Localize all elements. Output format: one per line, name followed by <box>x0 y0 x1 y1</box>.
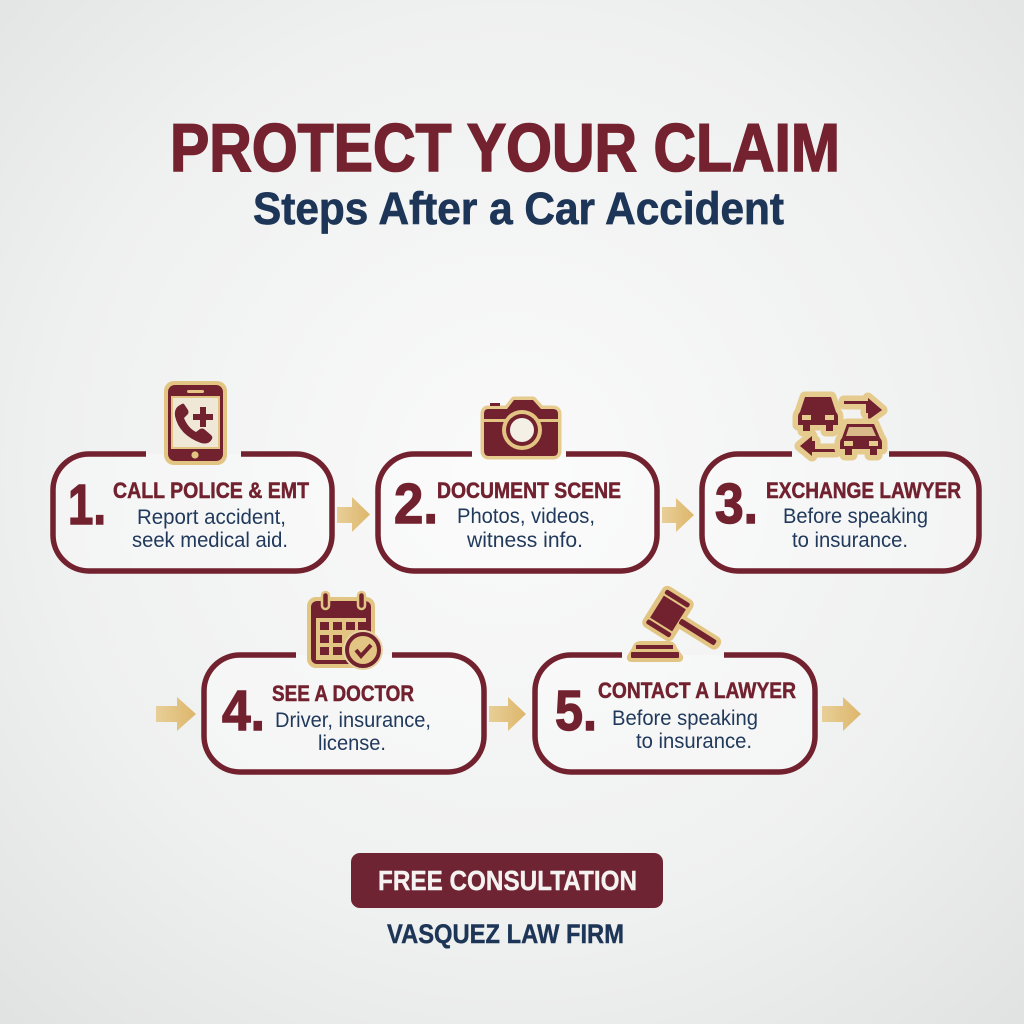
button: free consultation <box>351 853 663 908</box>
step number 4: 4. <box>222 679 265 743</box>
description: step 2: witness info. <box>466 529 583 552</box>
arrow: after step 5 <box>822 697 861 731</box>
arrow: into step 4 <box>156 697 196 731</box>
description: step 2: Photos, videos, <box>457 505 595 528</box>
arrow: step 4 to 5 <box>489 697 526 731</box>
icon: gavel <box>627 584 732 666</box>
heading: see a doctor: SEE A DOCTOR <box>272 681 414 706</box>
step number 5: 5. <box>555 679 597 743</box>
step number 2: 2. <box>394 472 438 536</box>
description: step 4: Driver, insurance, <box>275 709 431 732</box>
panel: step 1 call police <box>53 381 332 571</box>
heading: contact a lawyer: CONTACT A LAWYER <box>598 678 796 703</box>
heading: exchange lawyer: EXCHANGE LAWYER <box>766 478 961 503</box>
description: step 3: Before speaking <box>783 505 928 528</box>
panel: step 2 document scene <box>378 400 657 571</box>
firm name: VASQUEZ LAW FIRM <box>387 919 624 949</box>
description: step 5: Before speaking <box>612 707 758 730</box>
description: step 5: to insurance. <box>636 730 752 753</box>
arrow: step 2 to 3 <box>662 498 694 532</box>
description: step 4: license. <box>318 732 386 755</box>
heading: call police: CALL POLICE & EMT <box>113 478 309 503</box>
title: PROTECT YOUR CLAIM <box>170 110 840 186</box>
icon: cars exchanging <box>798 397 882 456</box>
panel: step 4 see a doctor <box>204 592 484 772</box>
icon: phone with medical call <box>164 381 227 465</box>
subtitle: Steps After a Car Accident <box>253 183 784 234</box>
step number 1: 1. <box>68 473 106 537</box>
icon: calendar with check <box>307 592 383 670</box>
button: free consultation: FREE CONSULTATION <box>378 865 637 896</box>
icon: camera <box>484 400 558 456</box>
description: step 1: Report accident, <box>137 506 286 529</box>
description: step 1: seek medical aid. <box>132 529 288 552</box>
heading: document scene: DOCUMENT SCENE <box>437 478 621 503</box>
panel: step 5 contact a lawyer <box>535 584 815 772</box>
arrow: step 1 to 2 <box>337 497 370 532</box>
description: step 3: to insurance. <box>792 529 908 552</box>
panel: step 3 exchange lawyer <box>702 397 979 571</box>
step number 3: 3. <box>715 472 758 536</box>
